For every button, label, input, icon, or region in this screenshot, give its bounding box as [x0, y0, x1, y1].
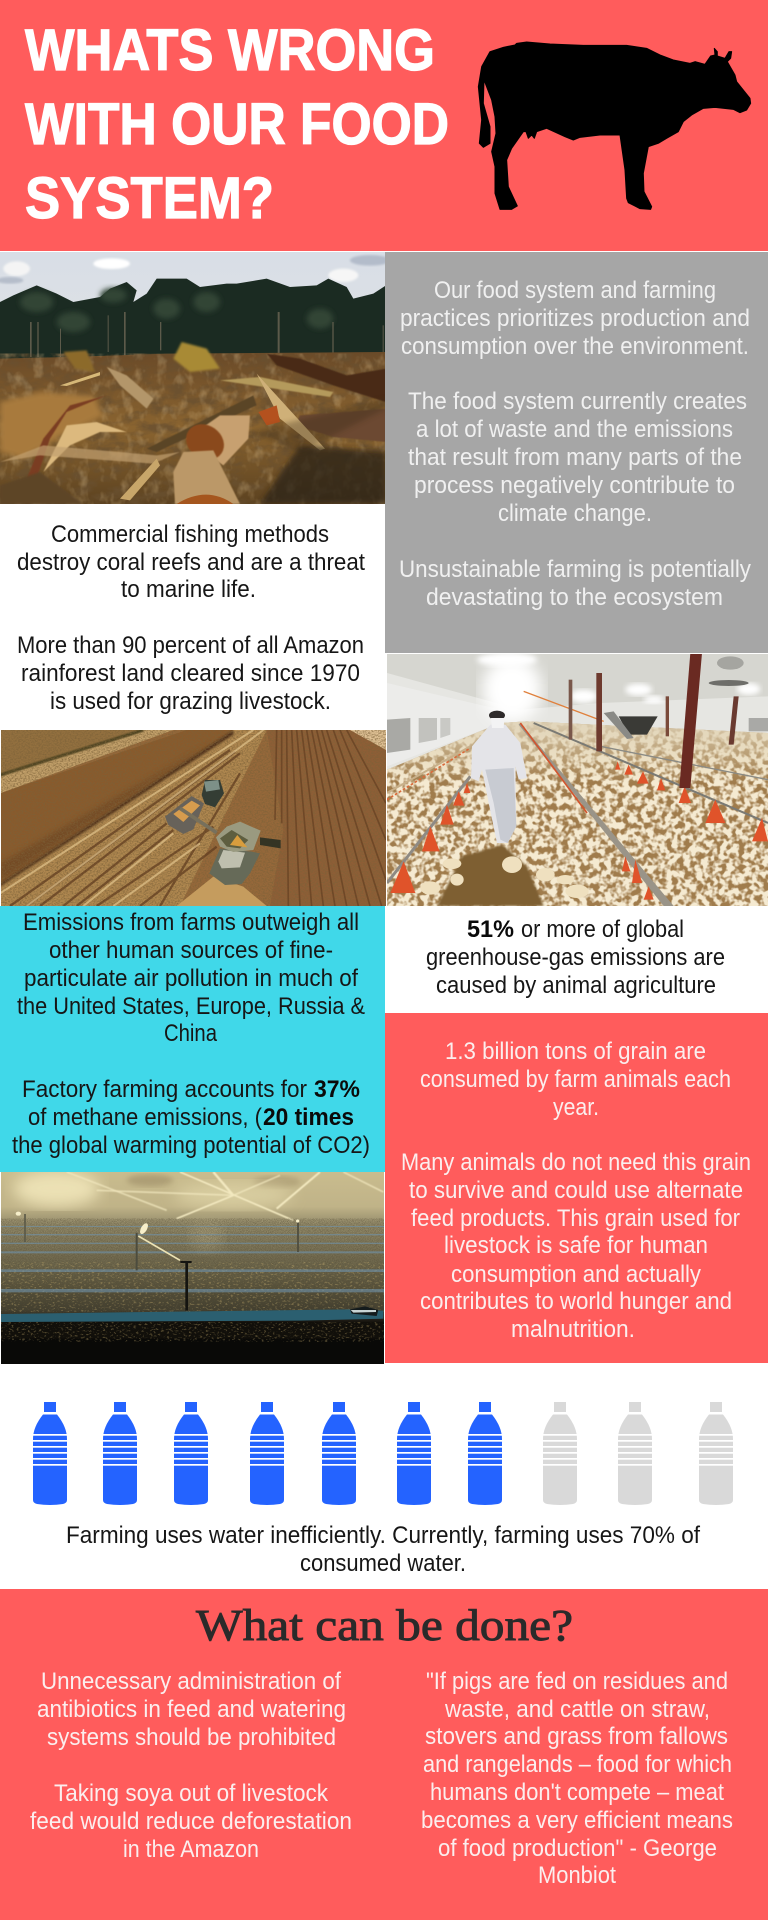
text block: fishing and Amazon facts: Commercial fishing methods: [51, 521, 329, 548]
panel: grain on red: feed products. This grain used for: [411, 1205, 740, 1232]
text block: 51 percent statistic: greenhouse-gas emissions are: [426, 944, 725, 971]
panel: intro text on grey: Our food system and farming: [434, 277, 716, 304]
photo: factory chicken barn with worker: [387, 654, 768, 906]
panel: emissions on cyan: [0, 906, 385, 1172]
panel: grain on red: consumption and actually: [451, 1261, 701, 1288]
text block: water use caption: consumed water.: [300, 1550, 466, 1577]
panel: grain on red: livestock is safe for human: [444, 1232, 708, 1259]
panel: grain on red: to survive and could use alternate: [409, 1177, 743, 1204]
text block: recommendations: Unnecessary administration of: [41, 1668, 341, 1695]
text block: George Monbiot quote: humans don't compete – meat: [430, 1779, 724, 1806]
text block: George Monbiot quote: "If pigs are fed on residues and: [426, 1668, 728, 1695]
pillars and feeder: [569, 653, 749, 788]
panel: emissions on cyan: China: [164, 1020, 218, 1047]
text block: George Monbiot quote: and rangelands – food for which: [423, 1751, 732, 1778]
text block: George Monbiot quote: becomes a very efficient means: [421, 1807, 733, 1834]
panel: grain on red: year.: [553, 1094, 599, 1121]
panel: emissions on cyan: the global warming potential of CO2): [12, 1132, 370, 1159]
text block: fishing and Amazon facts: destroy coral reefs and are a threat: [17, 549, 365, 576]
panel: intro text on grey: practices prioritizes production and: [400, 305, 750, 332]
panel: grain on red: 1.3 billion tons of grain are: [445, 1038, 706, 1065]
text block: water use caption: [66, 1522, 700, 1577]
title: WITH OUR FOOD: [25, 92, 449, 157]
text block: fishing and Amazon facts: More than 90 percent of all Amazon: [17, 632, 364, 659]
photo: cleared rainforest with felled logs: [0, 252, 385, 504]
panel: emissions on cyan: Emissions from farms outweigh all: [23, 909, 359, 936]
worker in white suit: [471, 711, 527, 843]
text block: water use caption: Farming uses water inefficiently. Currently, farming uses 70% of: [66, 1522, 700, 1549]
text block: 51 percent statistic: 51%: [467, 916, 514, 943]
panel: header: [0, 0, 768, 251]
panel: what can be done: [0, 1589, 768, 1920]
panel: intro text on grey: consumption over the environment.: [401, 333, 749, 360]
text block: fishing and Amazon facts: to marine life.: [121, 576, 256, 603]
panel: grain on red: malnutrition.: [511, 1316, 635, 1343]
feed lines: [387, 691, 768, 906]
panel: emissions on cyan: 37%: [314, 1076, 360, 1103]
text block: 51 percent statistic: caused by animal agriculture: [436, 972, 716, 999]
panel: intro text on grey: devastating to the ecosystem: [426, 584, 723, 611]
text block: George Monbiot quote: stovers and grass from fallows: [425, 1723, 728, 1750]
panel: emissions on cyan: the United States, Europe, Russia &: [17, 993, 365, 1020]
text block: fishing and Amazon facts: rainforest land cleared since 1970: [21, 660, 360, 687]
text block: recommendations: in the Amazon: [123, 1836, 259, 1863]
text block: 51 percent statistic: or more of global: [521, 916, 684, 943]
panel: intro text on grey: climate change.: [498, 500, 652, 527]
panel: intro text on grey: that result from many parts of the: [408, 444, 742, 471]
panel: emissions on cyan: Factory farming accounts for: [22, 1076, 307, 1103]
panel: intro text on grey: [385, 252, 768, 653]
panel: grain on red: [385, 1013, 768, 1363]
heading: What can be done?: [196, 1601, 573, 1650]
empty bottles: [542, 1402, 734, 1505]
photo: combine harvester in wheat field: [1, 730, 386, 906]
panel: intro text on grey: a lot of waste and the emissions: [416, 416, 733, 443]
text block: recommendations: systems should be prohibited: [47, 1724, 336, 1751]
panel: intro text on grey: The food system currently creates: [408, 388, 747, 415]
vehicles: [165, 780, 281, 885]
chart: water bottles pictogram, seven of ten filled: [32, 1402, 734, 1505]
photo: irrigation sprinklers over field: [1, 1172, 384, 1364]
icon: cow silhouette: [478, 42, 751, 209]
filled bottles: [32, 1402, 503, 1505]
text block: recommendations: [30, 1668, 352, 1863]
text block: George Monbiot quote: [421, 1668, 733, 1889]
text block: recommendations: Taking soya out of livestock: [54, 1780, 329, 1807]
text block: George Monbiot quote: Monbiot: [538, 1862, 616, 1889]
panel: emissions on cyan: particulate air pollution in much of: [24, 965, 358, 992]
panel: grain on red: consumed by farm animals each: [420, 1066, 731, 1093]
text block: recommendations: feed would reduce deforestation: [30, 1808, 352, 1835]
panel: emissions on cyan: of methane emissions, (: [28, 1104, 262, 1131]
title: WHATS WRONG: [25, 18, 435, 83]
text block: George Monbiot quote: waste, and cattle on straw,: [444, 1696, 710, 1723]
text block: fishing and Amazon facts: is used for grazing livestock.: [50, 688, 331, 715]
text block: 51 percent statistic: [426, 916, 725, 999]
panel: intro text on grey: process negatively contribute to: [414, 472, 735, 499]
panel: intro text on grey: Unsustainable farming is potentially: [399, 556, 751, 583]
panel: emissions on cyan: 20 times: [263, 1104, 354, 1131]
text block: fishing and Amazon facts: [17, 521, 365, 715]
title: [25, 18, 449, 231]
panel: grain on red: contributes to world hunger and: [420, 1288, 732, 1315]
text block: recommendations: antibiotics in feed and watering: [37, 1696, 346, 1723]
title: SYSTEM?: [25, 166, 274, 231]
panel: emissions on cyan: other human sources of fine-: [49, 937, 333, 964]
text block: George Monbiot quote: of food production" - George: [438, 1835, 717, 1862]
